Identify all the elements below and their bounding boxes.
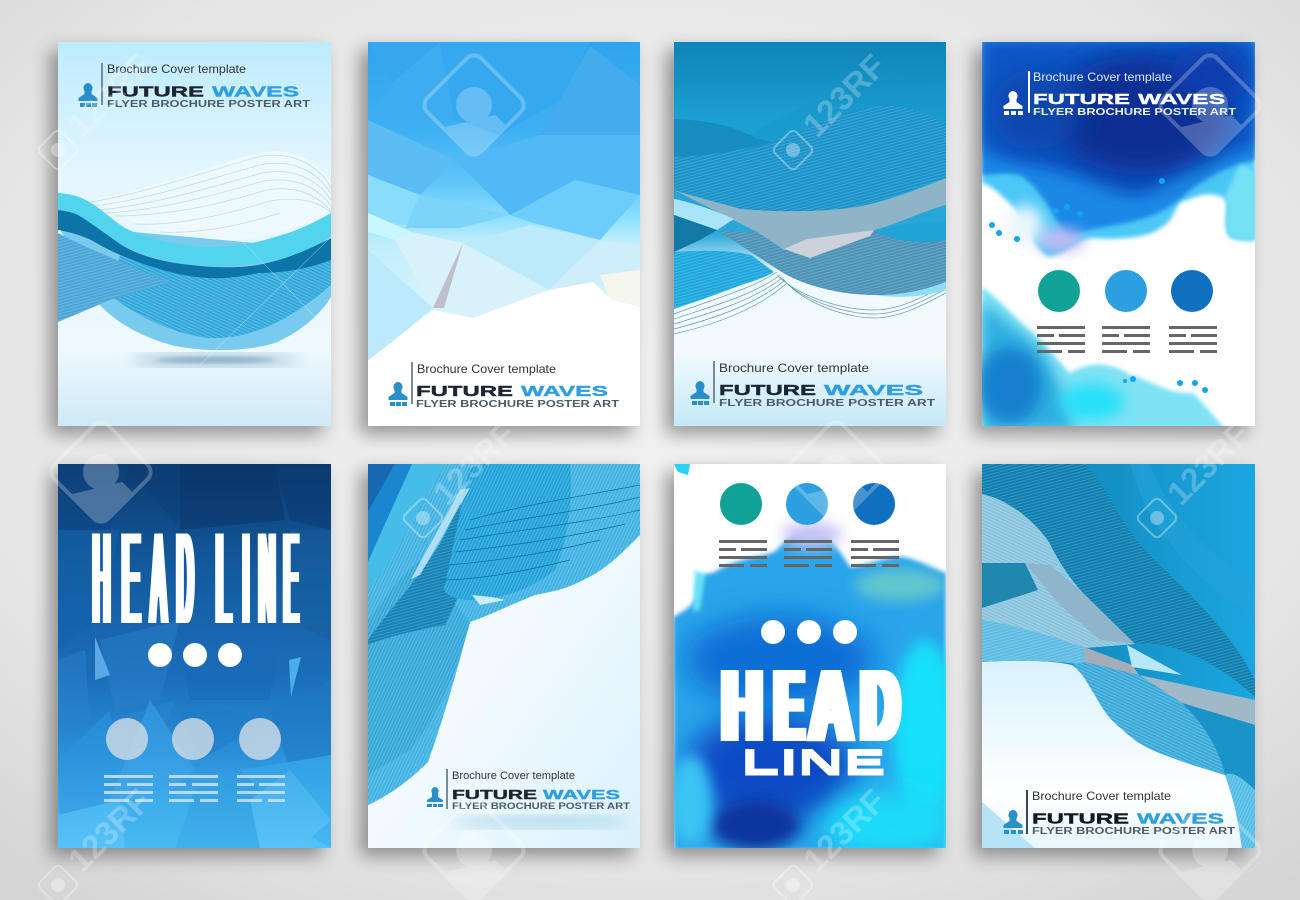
logo: brochure 1: Brochure Cover template bbox=[107, 62, 246, 76]
three dots bbox=[761, 620, 857, 644]
panel: brochure 6, wave top bbox=[368, 464, 640, 848]
watermark text: 123RF bbox=[426, 415, 523, 512]
logo: brochure 2 bbox=[388, 362, 620, 410]
headline HEAD: H bbox=[722, 650, 762, 762]
text placeholder lines bbox=[719, 540, 899, 567]
logo: brochure 3: FLYER BROCHURE POSTER ART bbox=[719, 397, 936, 409]
watermark text: 123RF bbox=[61, 47, 158, 144]
three circles bbox=[1038, 270, 1213, 312]
logo: brochure 6: WAVES bbox=[543, 787, 621, 802]
headline: A bbox=[151, 505, 166, 651]
panel: brochure 5, dark poly headline: E bbox=[284, 505, 298, 651]
headline HEAD: A bbox=[810, 650, 852, 762]
headline HEAD bbox=[720, 670, 902, 742]
polygons bbox=[368, 42, 640, 362]
three translucent circles bbox=[106, 718, 281, 760]
logo: brochure 8 bbox=[1004, 789, 1236, 837]
polygons bbox=[58, 464, 331, 848]
logo: brochure 4: FUTURE bbox=[1033, 91, 1130, 108]
logo: brochure 4: Brochure Cover template bbox=[1033, 70, 1172, 84]
logo: brochure 1: WAVES bbox=[212, 84, 299, 100]
logo: brochure 8: FUTURE bbox=[1032, 810, 1129, 828]
logo: brochure 8: WAVES bbox=[1137, 810, 1224, 828]
logo: brochure 2: FLYER BROCHURE POSTER ART bbox=[416, 398, 620, 410]
logo: brochure 4: FLYER BROCHURE POSTER ART bbox=[1033, 106, 1237, 118]
logo: brochure 4 bbox=[1004, 70, 1237, 118]
paint dots bbox=[989, 178, 1208, 393]
logo: brochure 2: FUTURE bbox=[416, 383, 513, 400]
watermark text: 123RF bbox=[796, 47, 893, 144]
watermark text: 123RF bbox=[1160, 415, 1257, 512]
logo: brochure 2: Brochure Cover template bbox=[417, 362, 556, 376]
headline bbox=[92, 534, 300, 623]
small stamp marks bbox=[37, 129, 1178, 900]
logo: brochure 3: FUTURE bbox=[719, 382, 816, 399]
panel: brochure 7, watercolour headline bbox=[668, 464, 960, 860]
headline HEAD: E bbox=[775, 650, 803, 762]
text placeholder lines bbox=[104, 775, 285, 802]
logo: brochure 1: FUTURE bbox=[107, 84, 204, 100]
logo: brochure 3: WAVES bbox=[824, 382, 923, 399]
three dots bbox=[148, 643, 242, 667]
headline: H bbox=[93, 505, 110, 651]
logo: brochure 8: Brochure Cover template bbox=[1032, 789, 1171, 803]
headline LINE: LINE bbox=[741, 744, 886, 782]
logo: brochure 4: WAVES bbox=[1138, 91, 1225, 108]
panel: brochure 5, dark poly headline: N bbox=[259, 505, 275, 651]
headline: L bbox=[216, 505, 231, 651]
three circles bbox=[720, 483, 895, 525]
watermark text: 123RF bbox=[796, 782, 893, 879]
panel: brochure 5, dark poly headline bbox=[58, 464, 331, 848]
panel: brochure 3, blue waves bbox=[674, 42, 946, 426]
logo: brochure 3 bbox=[690, 361, 936, 409]
logo: brochure 2: WAVES bbox=[521, 383, 608, 400]
headline: D bbox=[177, 505, 193, 651]
watermark text: 123RF bbox=[61, 782, 158, 879]
logo: brochure 6: FUTURE bbox=[452, 787, 538, 802]
panel: brochure 4, watercolour with circles bbox=[978, 40, 1255, 430]
headline: I bbox=[243, 505, 249, 651]
logo: brochure 6: Brochure Cover template bbox=[452, 770, 575, 782]
headline HEAD: D bbox=[861, 650, 899, 762]
logo: brochure 6: FLYER BROCHURE POSTER ART bbox=[452, 801, 630, 812]
panel: brochure 1, light wave bbox=[58, 42, 331, 426]
logo: brochure 3: Brochure Cover template bbox=[719, 361, 869, 375]
panel: brochure 8, wave corner bbox=[982, 464, 1255, 850]
panel: brochure 2, low-poly bbox=[366, 42, 640, 430]
logo: brochure 6 bbox=[427, 769, 630, 812]
logo: brochure 1: FLYER BROCHURE POSTER ART bbox=[107, 98, 311, 110]
headline: E bbox=[122, 505, 140, 651]
text placeholder lines bbox=[1037, 326, 1217, 353]
logo: brochure 8: FLYER BROCHURE POSTER ART bbox=[1032, 825, 1236, 837]
logo: brochure 1 bbox=[78, 62, 311, 110]
